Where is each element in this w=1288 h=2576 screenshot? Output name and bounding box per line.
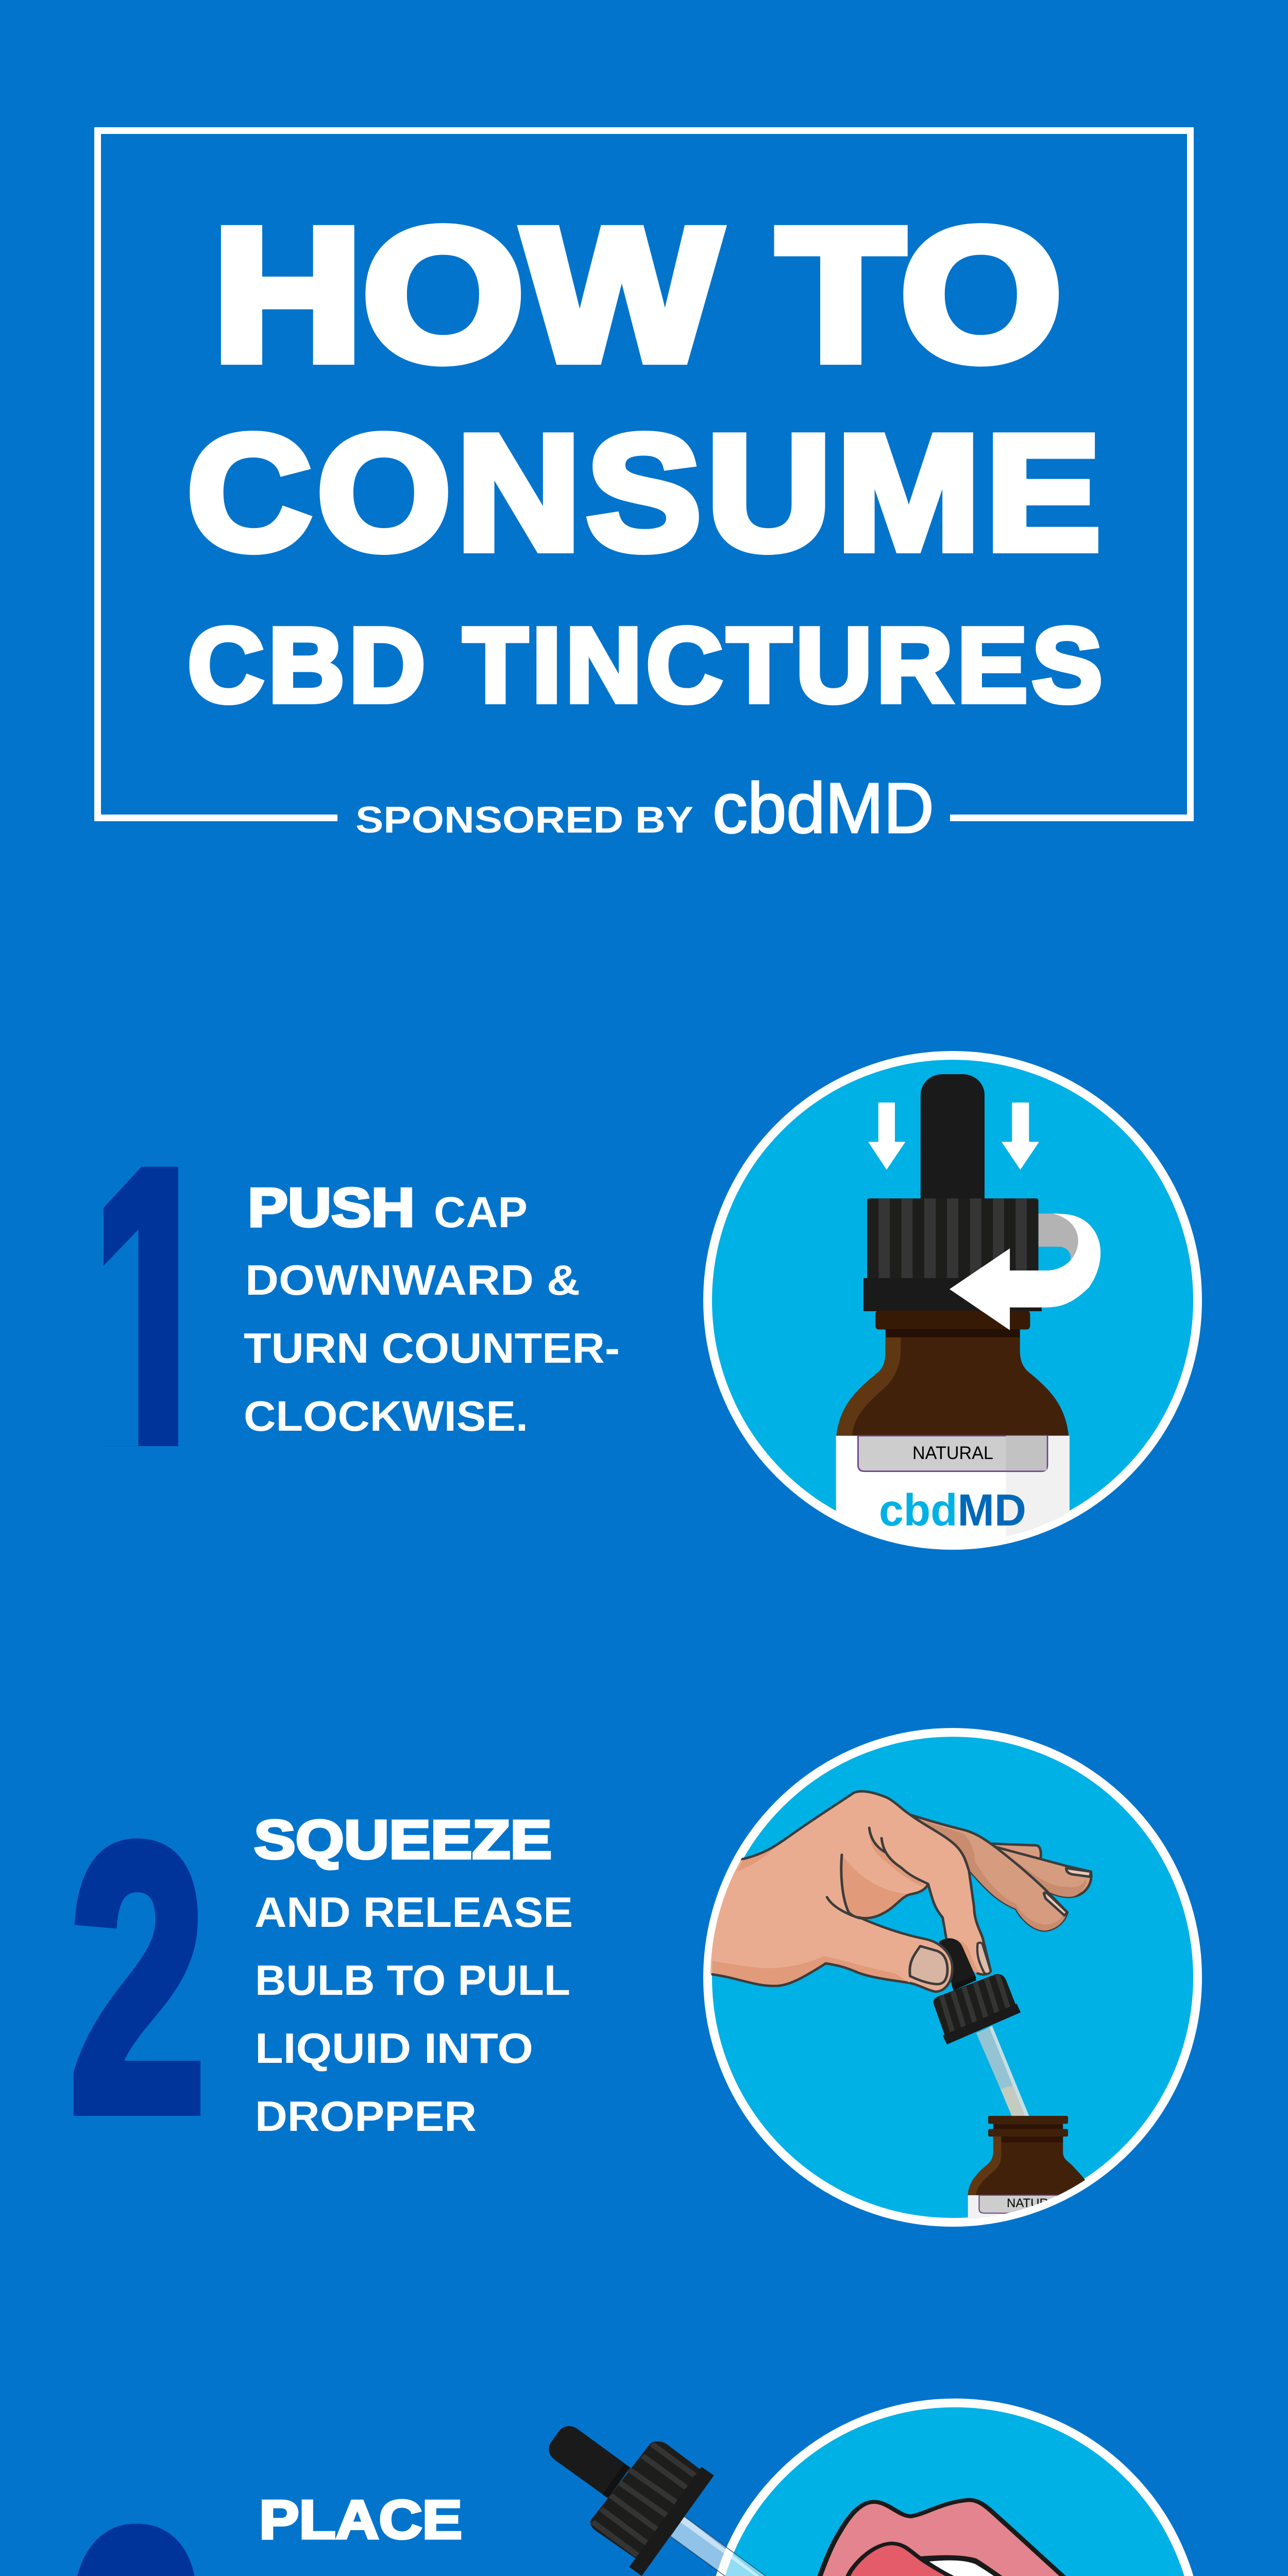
heading: consume: CONSUME [187, 401, 1106, 584]
sponsor logo: cbdMD [713, 769, 934, 848]
dropper in mouth [549, 2426, 904, 2576]
step 2 text: AND RELEASE [255, 1888, 573, 1936]
upper teeth [929, 2561, 1013, 2576]
step 3 text: PLACE [259, 2489, 462, 2550]
illustration: pushing and turning the bottle cap [708, 1055, 1197, 1587]
illustration: hand squeezing dropper [702, 1732, 1197, 2240]
step 2 text: LIQUID INTO [255, 2024, 533, 2072]
step 2 text: SQUEEZE [254, 1809, 552, 1870]
hand [702, 1791, 991, 1992]
dropper tube [976, 2026, 1030, 2117]
heading: cbd tinctures: CBD TINCTURES [188, 606, 1107, 724]
step 1 number: 1 [73, 1065, 232, 1598]
step 2 text: DROPPER [255, 2092, 477, 2140]
step 1 text [244, 1177, 620, 1440]
lips [789, 2500, 1146, 2576]
tongue [840, 2544, 1073, 2576]
open bottle [968, 2116, 1112, 2240]
step 1 text: TURN COUNTER- [244, 1324, 620, 1372]
title block [98, 131, 1190, 848]
step 2 text [254, 1809, 573, 2140]
dropper cap [934, 1938, 1021, 2044]
sponsored by: SPONSORED BY [355, 800, 693, 841]
thumb [827, 1897, 953, 1992]
dropper bulb [921, 1074, 985, 1199]
mouth interior [814, 2556, 1118, 2576]
down arrows [868, 1103, 1039, 1170]
step 1 text: CAP [434, 1188, 528, 1236]
step 1 text: CLOCKWISE. [244, 1392, 528, 1440]
turning arrow [950, 1214, 1100, 1330]
ribbed cap [863, 1198, 1042, 1311]
label word: NATURAL [912, 1443, 993, 1463]
heading: how to: HOW TO [213, 190, 1062, 400]
step 2 text: BULB TO PULL [255, 1956, 570, 2004]
bottle label [836, 1436, 1070, 1587]
bottle logo: cbdMD [879, 1485, 1026, 1535]
step 1 text: DOWNWARD & [245, 1256, 580, 1304]
step 3 text [258, 2489, 681, 2576]
bottle body [836, 1311, 1069, 1436]
back fingers [910, 1815, 1091, 1930]
partial label word: NATURAL [1007, 2196, 1063, 2210]
step 1 text: PUSH [248, 1177, 415, 1238]
illustration: dropper under tongue [549, 2403, 1199, 2576]
step 2 number: 2 [69, 1766, 206, 2191]
